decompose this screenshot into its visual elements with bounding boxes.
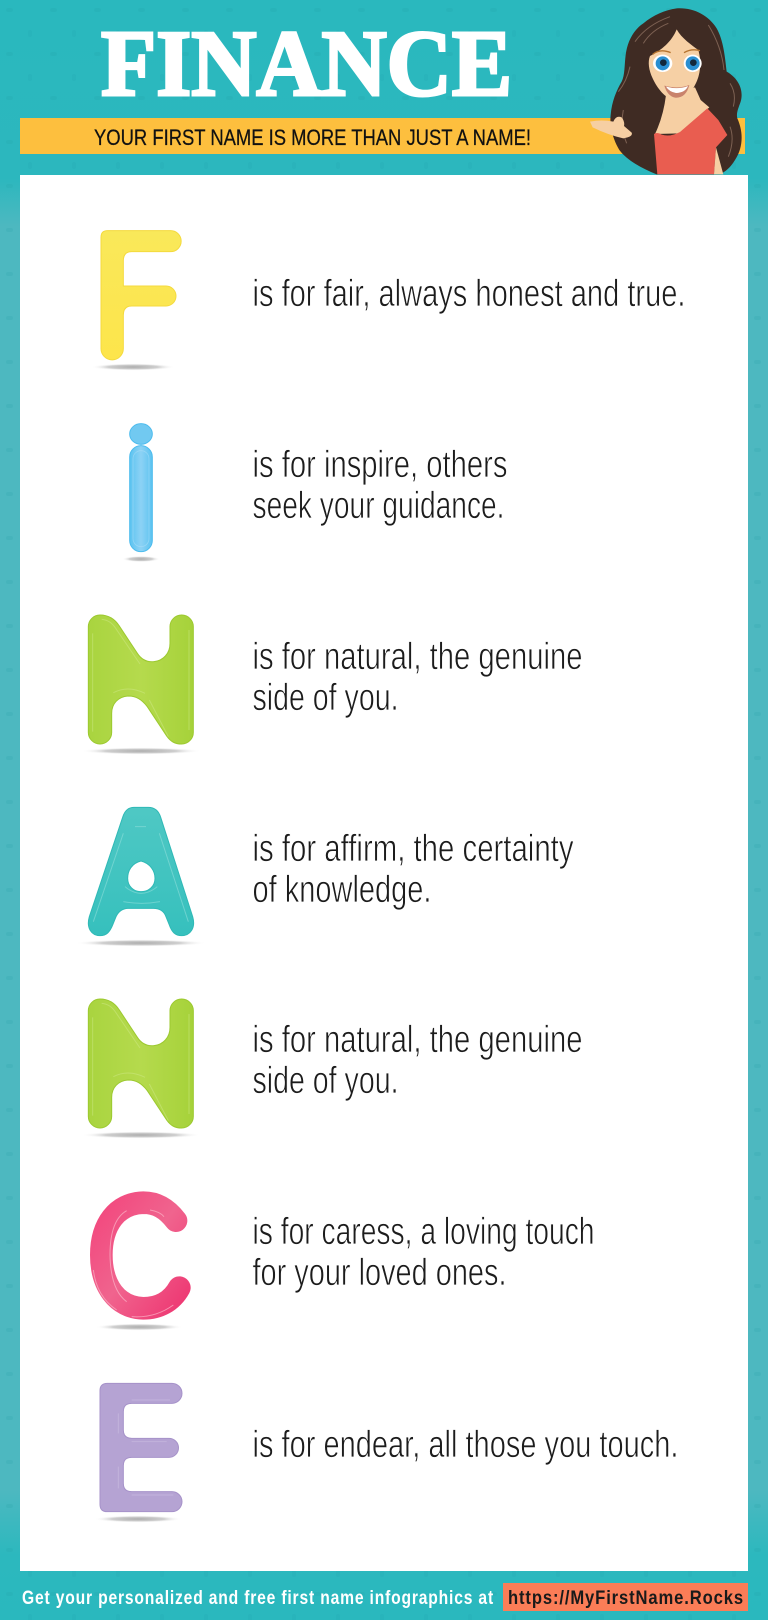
footer caption: Get your personalized and free first name infographics at xyxy=(22,1588,494,1609)
footer link badge xyxy=(503,1583,748,1611)
subtitle banner: YOUR FIRST NAME IS MORE THAN JUST A NAME! xyxy=(94,125,531,150)
hair parting and face xyxy=(649,29,700,100)
text: I xyxy=(252,444,508,527)
text: A: is for affirm, the certainty xyxy=(252,828,574,870)
letter N xyxy=(88,615,193,744)
text: C: is for caress, a loving touch xyxy=(252,1211,594,1253)
letter shadow xyxy=(94,1516,182,1522)
eyes xyxy=(653,55,702,72)
subtitle banner xyxy=(20,118,745,154)
text: C xyxy=(252,1211,594,1294)
row F xyxy=(91,231,686,370)
text: N: is for natural, the genuine xyxy=(252,636,582,678)
text: I: seek your guidance. xyxy=(252,485,504,527)
row A xyxy=(75,807,574,946)
letter A xyxy=(88,807,194,936)
letter N xyxy=(88,999,193,1128)
text: N xyxy=(252,636,582,719)
row N second xyxy=(81,999,582,1138)
row I xyxy=(122,424,508,562)
letter shadow xyxy=(95,1324,183,1330)
text: N second xyxy=(252,1019,582,1102)
letter shadow xyxy=(81,1132,201,1138)
mouth xyxy=(664,85,689,98)
letter E xyxy=(100,1383,182,1512)
text: A xyxy=(252,828,574,911)
hand xyxy=(590,117,632,138)
text: N second: is for natural, the genuine xyxy=(252,1019,582,1061)
text: N second: side of you. xyxy=(252,1060,398,1102)
letter F xyxy=(101,231,181,360)
letter shadow xyxy=(91,364,175,370)
row N xyxy=(81,615,582,754)
footer xyxy=(22,1583,748,1611)
letter shadow xyxy=(75,940,207,946)
text: I: is for inspire, others xyxy=(252,444,508,486)
shirt xyxy=(654,108,727,174)
row C xyxy=(93,1203,594,1330)
row E xyxy=(94,1383,678,1522)
letter shadow xyxy=(81,748,201,754)
letter shadow xyxy=(122,556,160,562)
neck xyxy=(655,87,709,134)
title: FINANCE xyxy=(101,12,512,116)
icon: cartoon woman xyxy=(590,8,742,174)
text: A: of knowledge. xyxy=(252,869,432,911)
text: N: side of you. xyxy=(252,677,398,719)
letter i xyxy=(130,424,152,552)
text: C: for your loved ones. xyxy=(252,1252,506,1294)
letter C xyxy=(93,1203,179,1317)
